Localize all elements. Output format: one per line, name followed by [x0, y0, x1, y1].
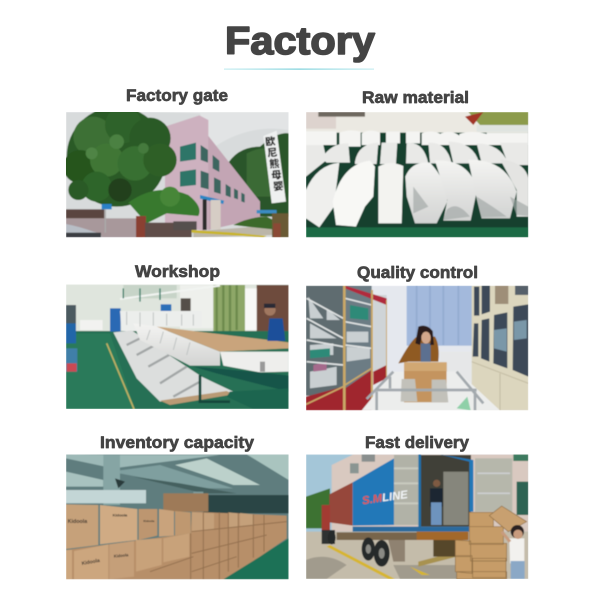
photo: workshop	[66, 284, 289, 409]
box lettering: Kidoola	[143, 519, 155, 523]
container lettering: S.MLINE	[361, 489, 409, 507]
banner lettering: 尼	[266, 144, 278, 160]
woman inspector	[398, 337, 439, 363]
front row of white boxes	[306, 163, 339, 227]
box lettering: Kidoola	[114, 552, 129, 559]
infographic: factory overview	[66, 26, 528, 580]
heading: factory gate: Factory gate	[126, 86, 228, 105]
photo: inventory capacity	[66, 454, 289, 579]
middle row of white boxes	[306, 142, 528, 177]
heading: raw material: Raw material	[362, 88, 469, 107]
lower row of boxes	[113, 330, 233, 402]
panel: workshop	[66, 262, 289, 409]
photo: raw material	[306, 112, 528, 237]
box lettering: Kidoola	[81, 558, 101, 567]
heading: inventory capacity: Inventory capacity	[100, 433, 255, 452]
panel: quality control	[306, 263, 528, 410]
photo: factory gate	[63, 107, 289, 237]
upper row of boxes	[136, 328, 221, 366]
floor	[223, 538, 289, 579]
box lettering	[68, 512, 155, 567]
photo: fast delivery	[306, 454, 528, 579]
cardboard sheet	[157, 327, 289, 352]
panel: inventory capacity	[66, 433, 289, 579]
box lettering: Kidoola	[113, 512, 128, 517]
banner lettering: 欧	[264, 133, 277, 148]
banner lettering: 婴	[272, 177, 284, 193]
photo: quality control	[306, 286, 528, 410]
panel: fast delivery	[306, 433, 528, 579]
heading: fast delivery: Fast delivery	[365, 433, 470, 452]
man in blue	[267, 318, 285, 341]
title: Factory	[225, 20, 375, 63]
panel: raw material	[306, 88, 528, 237]
banner lettering: 熊	[268, 155, 280, 171]
heading: quality control: Quality control	[357, 263, 478, 282]
worker with box	[509, 538, 524, 563]
title underline	[224, 69, 374, 70]
heading: workshop: Workshop	[135, 262, 220, 281]
box lettering: Kidoola	[68, 519, 87, 525]
panel: factory gate	[63, 86, 289, 237]
cartons	[66, 512, 287, 579]
man in container	[430, 488, 443, 507]
back row of white boxes	[306, 130, 528, 147]
main tree	[63, 107, 177, 207]
green tables	[193, 367, 289, 392]
banner lettering: 母	[270, 166, 282, 182]
